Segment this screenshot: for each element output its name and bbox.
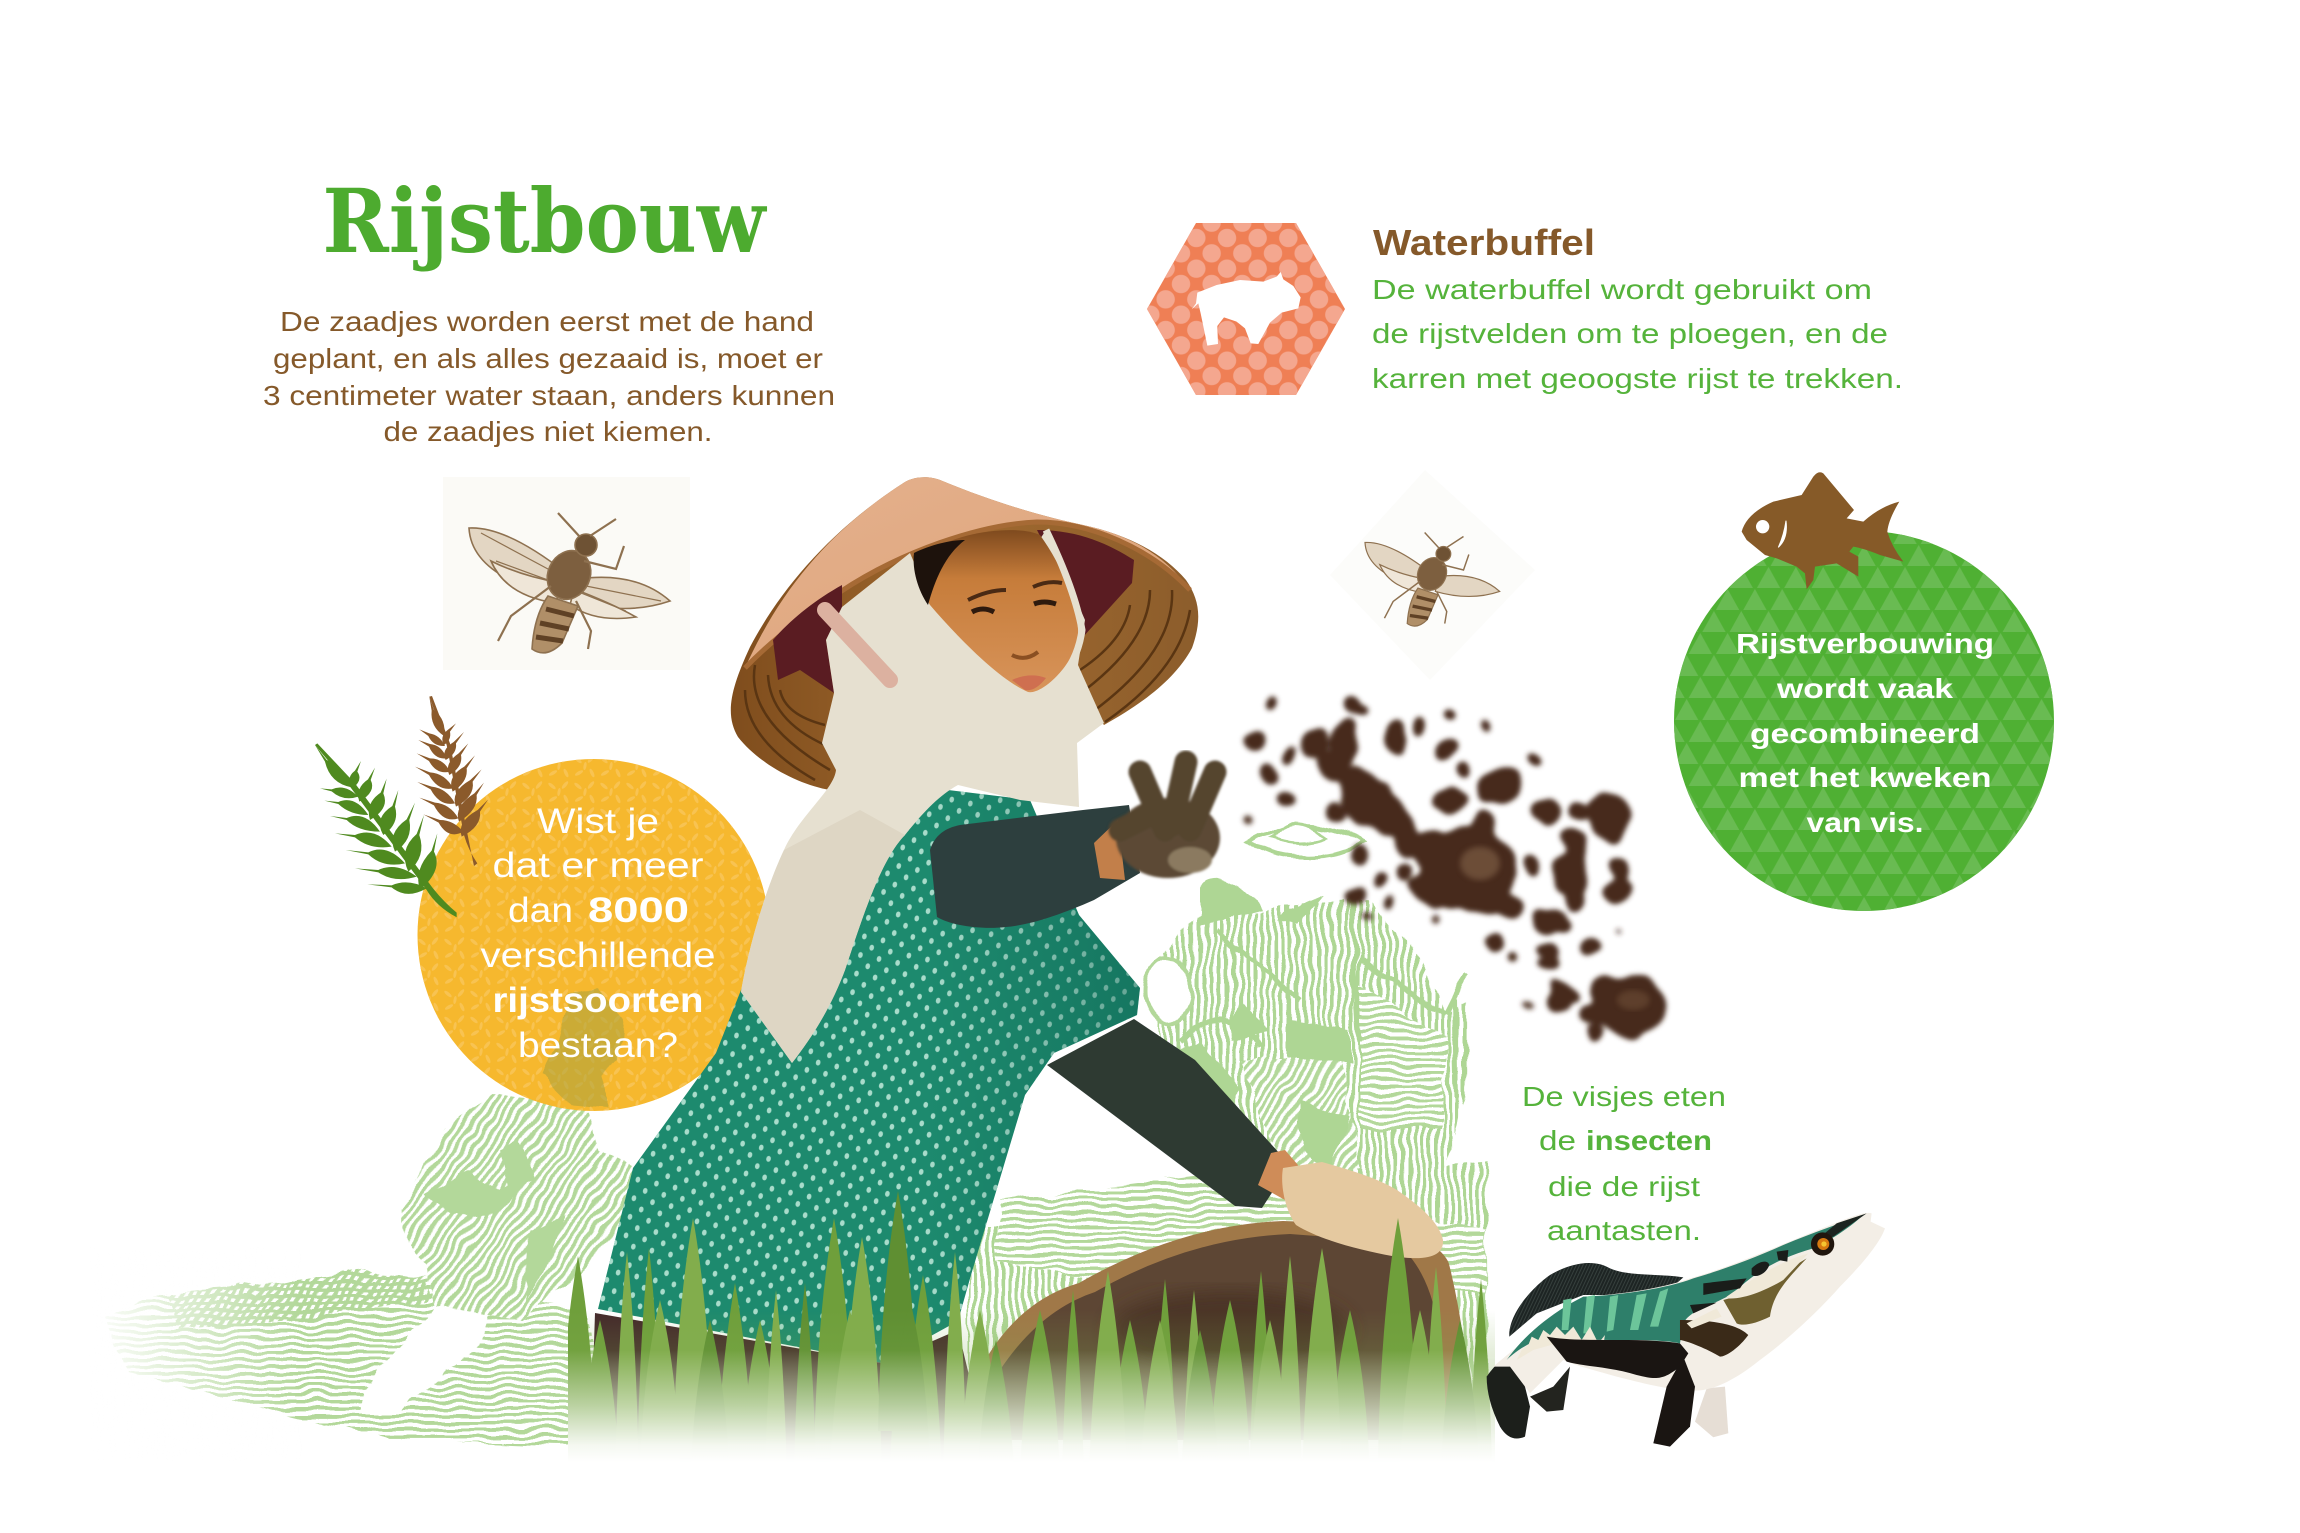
text block: intro: 3 centimeter water staan, anders kunnen: [263, 380, 835, 411]
basket: [984, 1221, 1472, 1440]
wrist lower: [1258, 1150, 1298, 1200]
trousers: [590, 1313, 975, 1462]
text block: fish eat insects: insecten: [1586, 1125, 1712, 1156]
dress: [598, 790, 1140, 1363]
grass: [558, 1191, 1495, 1530]
scarf tuck and handle: [825, 610, 890, 680]
text block: waterbuffel: [1372, 222, 1903, 394]
text: fish fact: Rijstverbouwing: [1736, 628, 1994, 659]
sleeve: dark arm outstretched: [930, 805, 1140, 928]
text block: fish eat insects: de: [1539, 1125, 1576, 1156]
face: [914, 530, 1082, 692]
text block: waterbuffel: Waterbuffel: [1373, 222, 1595, 263]
icon: large engraved bee: [443, 477, 690, 670]
title: Rijstbouw: [322, 169, 768, 273]
text: fish fact: gecombineerd: [1750, 718, 1980, 749]
hat: [731, 477, 1198, 790]
panel: green fish fact circle: [1674, 531, 2054, 911]
panel: yellow rice fact circle: [418, 759, 770, 1111]
engraving overlap on yellow circle: [540, 985, 623, 1108]
text: yellow circle question: dan: [508, 891, 573, 930]
sleeve: dark lower arm: [1047, 1019, 1290, 1208]
text: fish fact: wordt vaak: [1776, 673, 1954, 704]
infographic: Rijstbouw: [106, 185, 2054, 1452]
icon: green wheat ear: [315, 743, 457, 917]
text: yellow circle question: rijstsoorten: [492, 981, 704, 1020]
text: yellow circle question: 8000: [588, 891, 689, 930]
scarf: [741, 530, 1104, 1063]
text: fish fact: van vis.: [1806, 807, 1924, 838]
text block: fish eat insects: De visjes eten: [1522, 1081, 1726, 1112]
scarf tail shading: [741, 810, 905, 1063]
text block: fish eat insects: die de rijst: [1548, 1171, 1700, 1202]
text: yellow circle question: bestaan?: [518, 1026, 678, 1065]
text block: fish eat insects: aantasten.: [1547, 1215, 1701, 1246]
text: fish fact: [1736, 628, 1994, 838]
text: yellow circle question: [480, 802, 716, 1065]
glove: [1282, 1162, 1443, 1258]
text block: intro: de zaadjes niet kiemen.: [384, 416, 712, 447]
text block: fish eat insects: [1522, 1081, 1726, 1246]
text block: intro: geplant, en als alles gezaaid is, moet er: [273, 343, 823, 374]
icon: buffalo silhouette: [1192, 272, 1301, 346]
engraving: right farmers with hats: [968, 824, 1490, 1420]
engraving: left crouching figure and field: [90, 1093, 633, 1460]
text: yellow circle question: Wist je: [537, 802, 659, 841]
text block: intro: [263, 306, 835, 447]
text: yellow circle question: dat er meer: [492, 846, 704, 885]
icon: small engraved bee: [1330, 470, 1535, 680]
icon: waterbuffel hexagon: [1147, 223, 1345, 395]
text: fish fact: met het kweken: [1738, 762, 1992, 793]
text: yellow circle question: verschillende: [480, 936, 716, 975]
text block: intro: De zaadjes worden eerst met de hand: [280, 306, 814, 337]
text block: waterbuffel: karren met geoogste rijst te trekken.: [1372, 363, 1903, 394]
photo: snakehead fish: [1487, 1213, 1885, 1447]
wrist: [1094, 820, 1125, 880]
hand: [1116, 762, 1220, 878]
text block: waterbuffel: De waterbuffel wordt gebruikt om: [1372, 274, 1872, 305]
photo: rice farmer woman: [590, 477, 1472, 1462]
icon: brown wheat ear: [415, 696, 488, 866]
text block: waterbuffel: de rijstvelden om te ploegen, en de: [1372, 318, 1888, 349]
soil splatter: [1243, 694, 1665, 1040]
icon: brown fish: [1742, 472, 1903, 589]
